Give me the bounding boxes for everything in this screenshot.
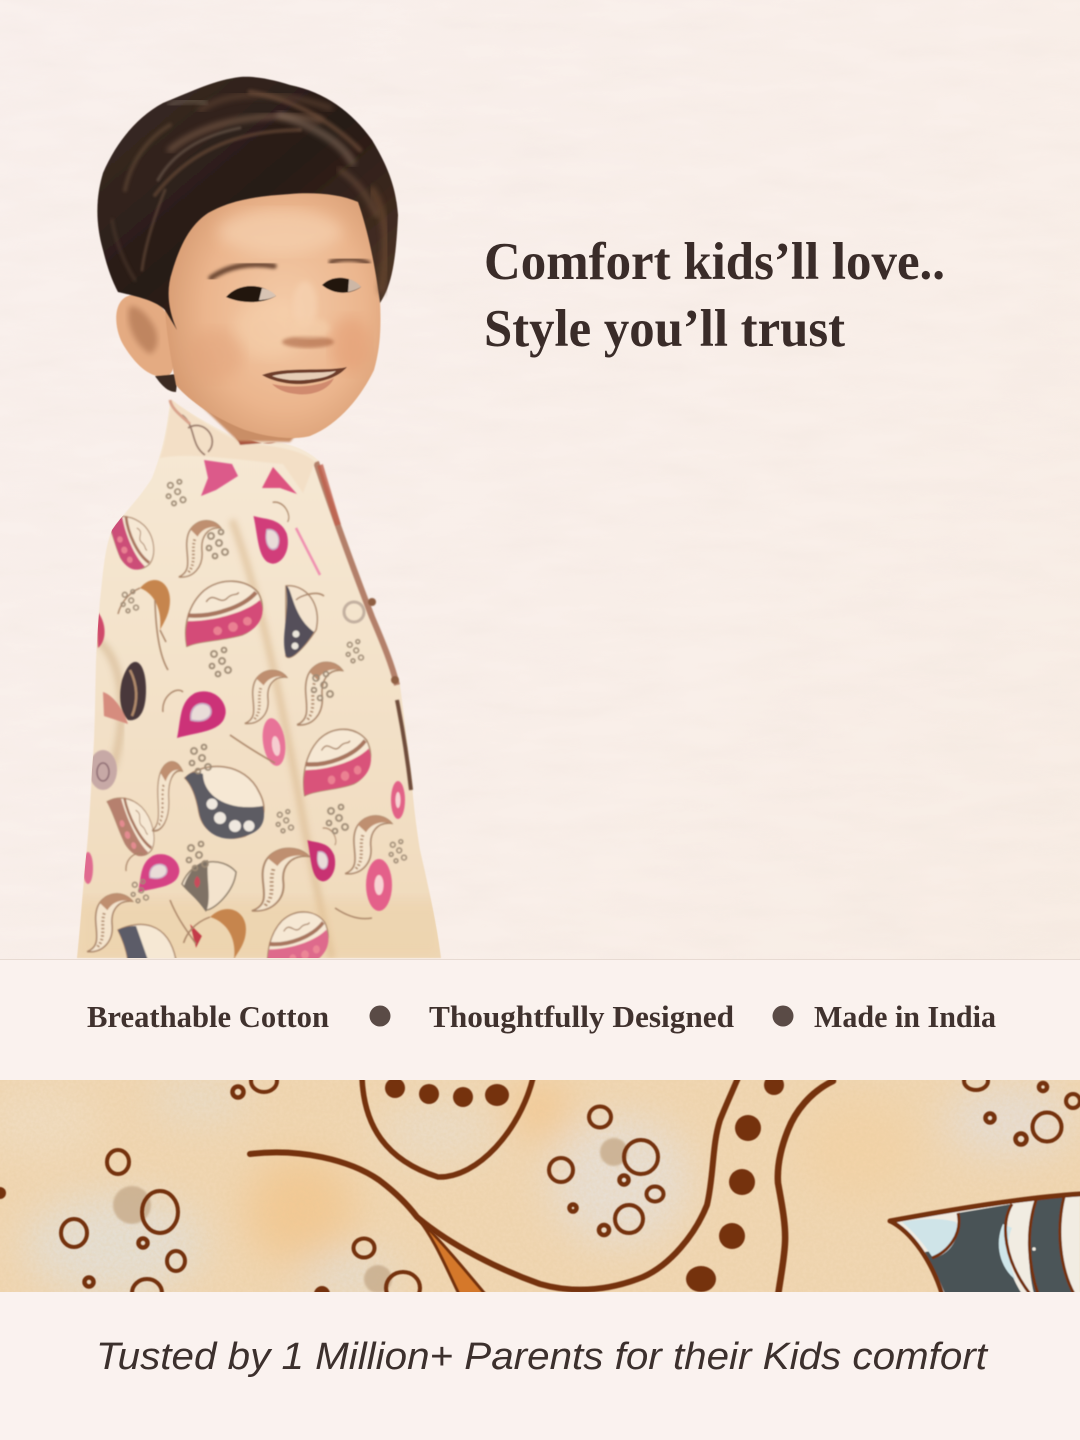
bullet dot (772, 1006, 794, 1026)
feature: breathable cotton: Breathable Cotton (87, 999, 329, 1034)
taupe bird motif (182, 862, 236, 910)
feature: thoughtfully designed: Thoughtfully Designed (429, 999, 734, 1034)
print outlines (58, 1080, 1080, 1292)
tan blots (113, 1138, 628, 1293)
photo: boy in printed kurta (75, 77, 445, 973)
orange leaves (118, 580, 170, 642)
feature: made in india: Made in India (814, 999, 996, 1034)
solid print dots (0, 1075, 784, 1302)
ear (116, 294, 178, 392)
pink drops (163, 690, 226, 738)
bullet dot (370, 1006, 390, 1026)
paisley tails (245, 670, 287, 724)
face (164, 170, 380, 438)
dark motif on back (120, 662, 146, 720)
heading: Comfort kids’ll love.. (484, 233, 945, 291)
connecting lines (155, 593, 372, 944)
fish motif (890, 1194, 1080, 1294)
placket and buttons (160, 400, 411, 790)
grey stripe bowl (284, 586, 317, 657)
grey spotted bowl (185, 766, 264, 839)
eyebrows (211, 264, 274, 278)
heading: Style you’ll trust (484, 300, 845, 358)
pink and grey bowl motifs (186, 581, 263, 646)
nose (282, 336, 334, 348)
panel: feature strip (0, 959, 1080, 1080)
kurta (75, 400, 445, 973)
panel: trust line (0, 1292, 1080, 1440)
neck (178, 385, 300, 442)
collar (160, 400, 315, 493)
fabric colour wash (0, 1078, 1075, 1297)
doodle dots (210, 648, 231, 676)
orange leaf (417, 1217, 485, 1294)
fabric print band (0, 1080, 1080, 1292)
tagline: Tusted by 1 Million+ Parents for their Kids comfort (96, 1336, 989, 1378)
smile (262, 367, 347, 384)
hair (97, 77, 398, 330)
eyes (226, 286, 276, 302)
sleeve shading (232, 520, 332, 958)
heading (484, 233, 945, 358)
